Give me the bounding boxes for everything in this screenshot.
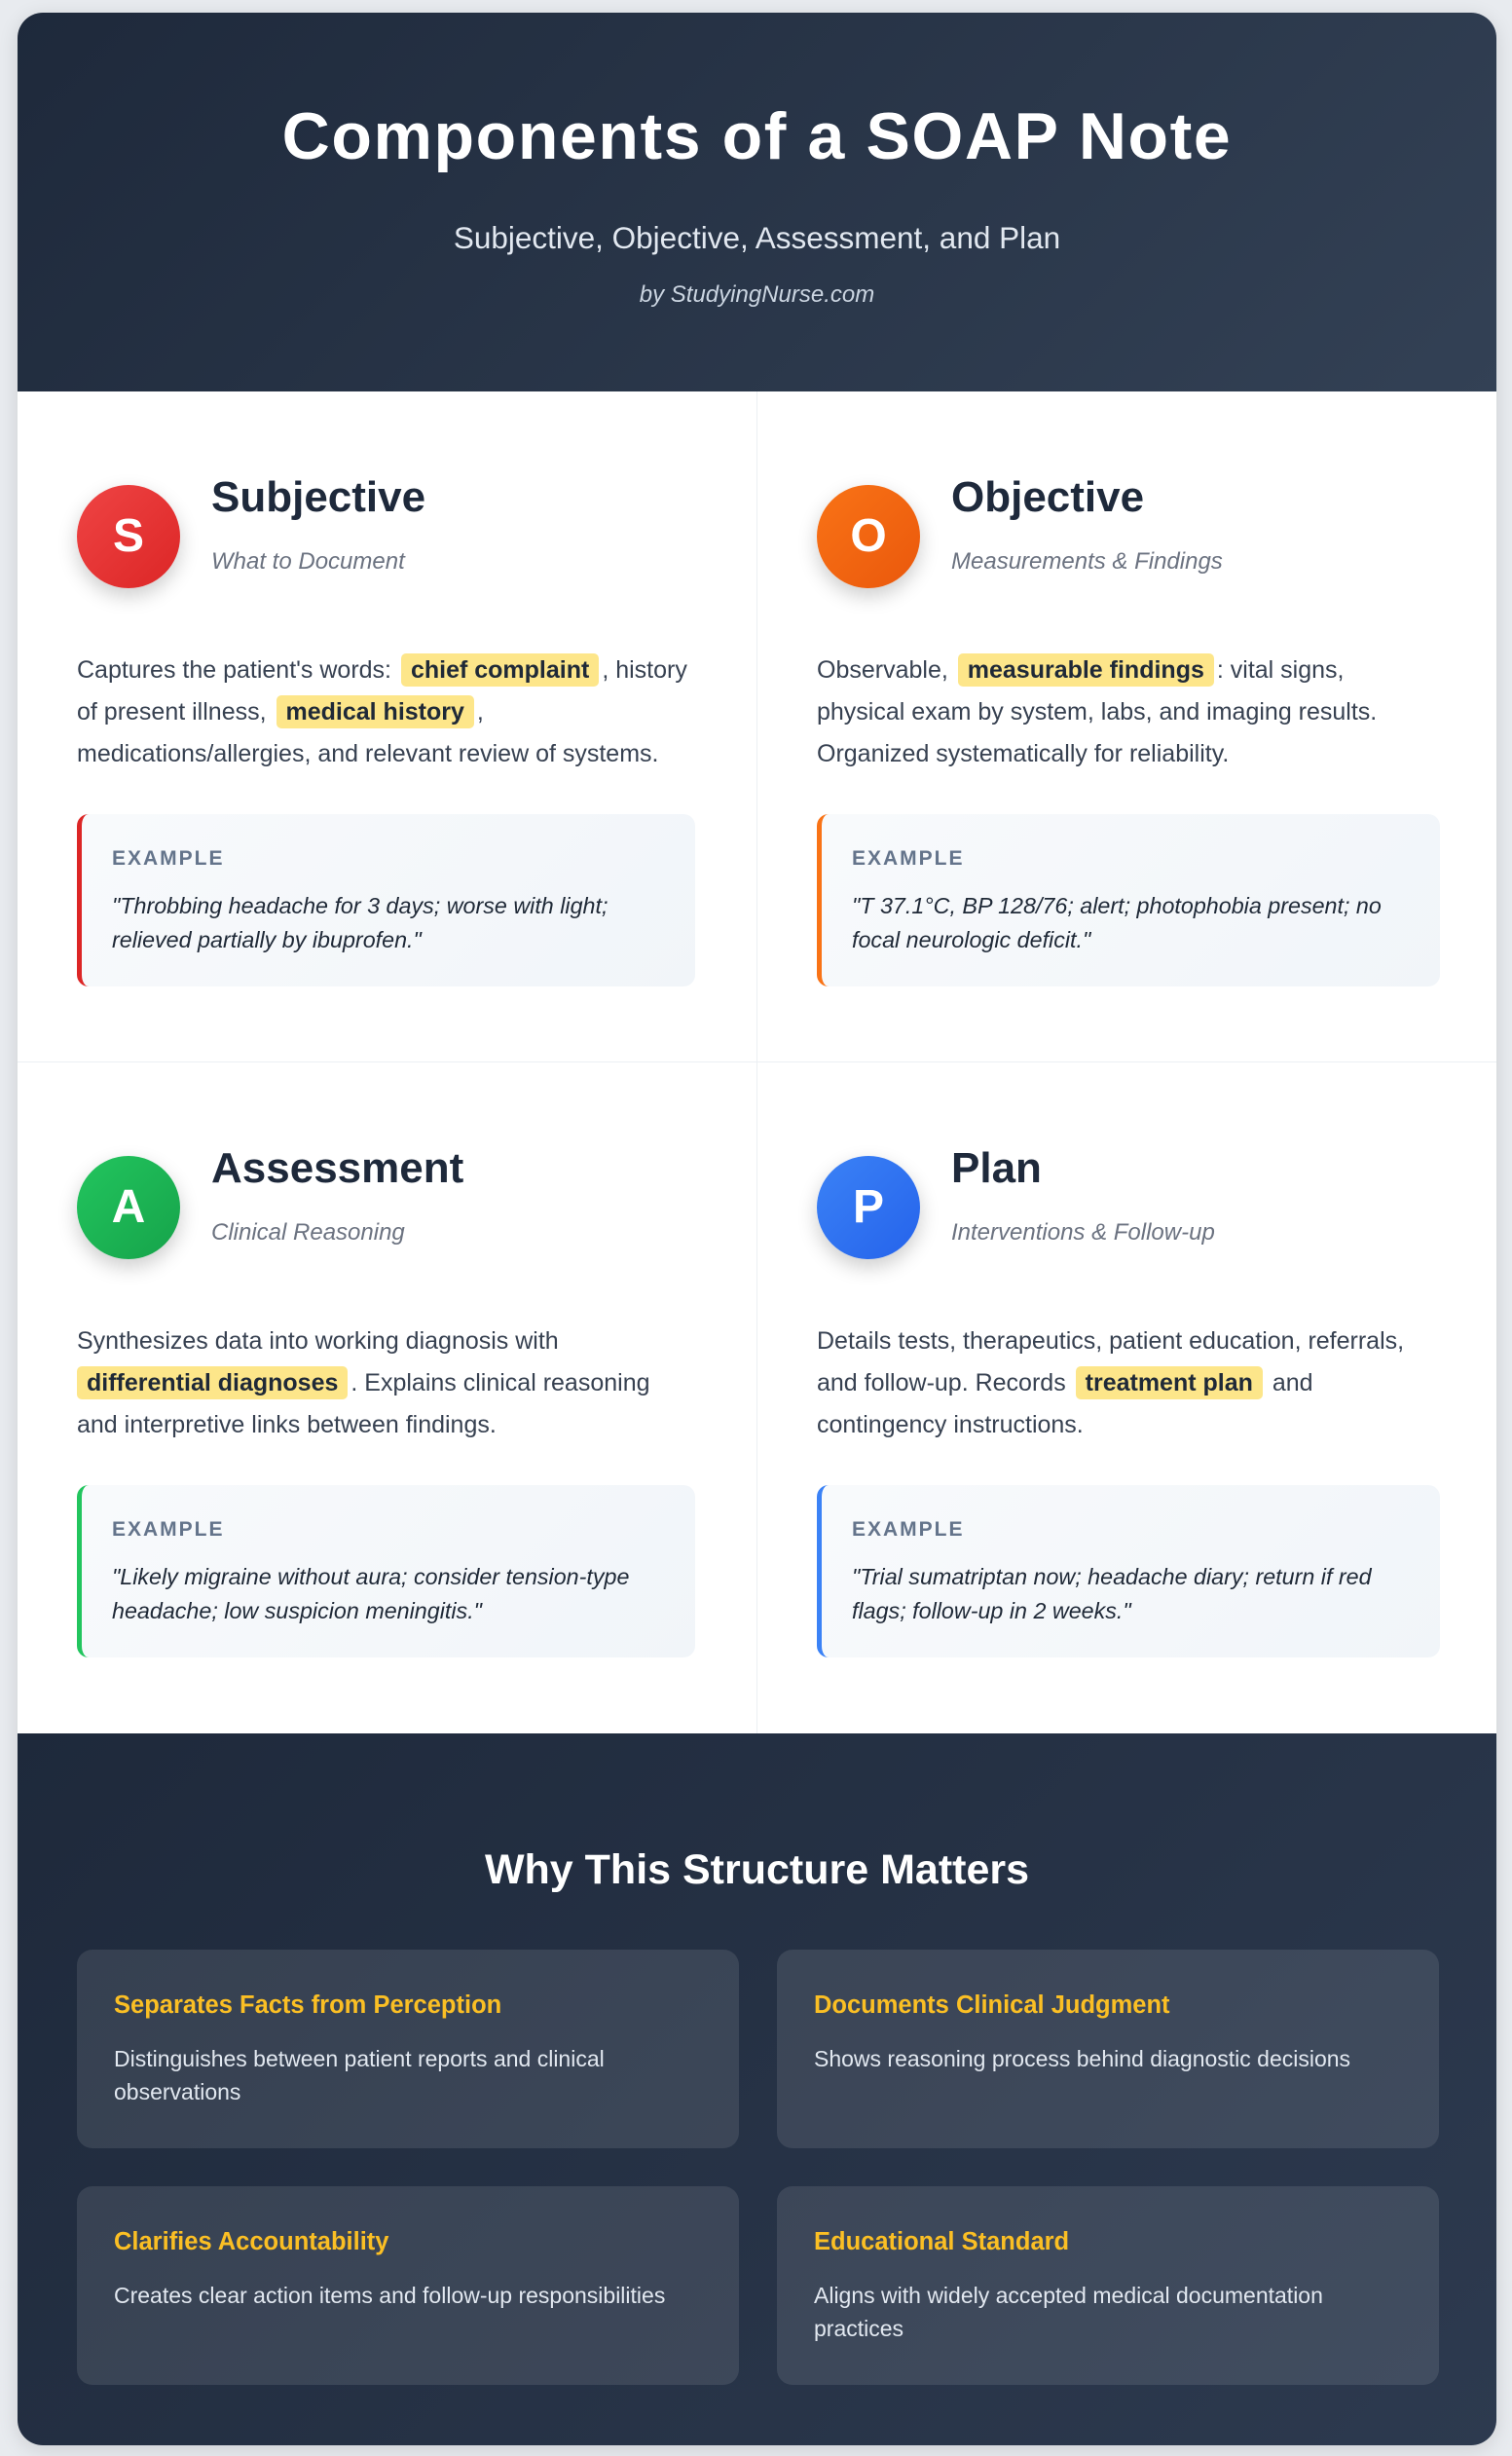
card: separates facts: Distinguishes between patient reports and clinical observations [114,2046,605,2104]
icon: A: A [112,1181,145,1233]
byline: by StudyingNurse.com [640,281,874,308]
example box: "Throbbing headache for 3 days; worse with light; relieved partially by ibuprofen." [112,893,608,952]
heading: Objective [951,473,1144,521]
card: educational standard [777,2186,1439,2385]
card: clinical judgment: Shows reasoning process behind diagnostic decisions [814,2046,1350,2071]
example box [817,1485,1440,1657]
heading: Subjective [211,473,425,521]
example box: EXAMPLE [112,1518,225,1541]
example box: "Trial sumatriptan now; headache diary; return if red flags; follow-up in 2 weeks." [852,1564,1372,1623]
card: accountability: Clarifies Accountability [114,2228,388,2255]
description: Captures the patient's words: chief complaint , history of present illness, medical history , medications/allergies, and relevant review of systems. [77,656,687,767]
icon: S [77,485,180,588]
example box: EXAMPLE [852,847,965,870]
panel: plan [808,1144,1440,1657]
example box: EXAMPLE [852,1518,965,1541]
panel: assessment [68,1144,695,1657]
subheading: Clinical Reasoning [211,1219,405,1246]
subheading: What to Document [211,548,405,575]
icon: S: S [113,510,144,562]
card: separates facts: Separates Facts from Perception [114,1991,501,2019]
card: educational standard: Aligns with widely accepted medical documentation practices [814,2283,1323,2341]
panel: objective [808,473,1440,986]
panel: why this structure matters [18,1733,1496,2445]
description: Synthesizes data into working diagnosis with differential diagnoses . Explains clinical reasoning and interpretive links between findings. [77,1327,650,1438]
description: Observable, measurable findings : vital signs, physical exam by system, labs, and imaging results. Organized systematically for reliability. [817,656,1377,767]
example box [77,814,695,986]
card: educational standard: Educational Standard [814,2228,1069,2255]
card: clinical judgment: Documents Clinical Judgment [814,1991,1170,2019]
panel: subjective [68,473,695,986]
example box: "T 37.1°C, BP 128/76; alert; photophobia present; no focal neurologic deficit." [852,893,1382,952]
subheading: Interventions & Follow-up [951,1219,1215,1246]
icon: O: O [850,510,887,562]
example box [817,814,1440,986]
description: Details tests, therapeutics, patient education, referrals, and follow-up. Records treatment plan and contingency instructions. [817,1327,1404,1438]
icon: P [817,1156,920,1259]
card: accountability: Creates clear action items and follow-up responsibilities [114,2283,665,2308]
icon: O [817,485,920,588]
title: Components of a SOAP Note [282,99,1232,173]
subtitle: Subjective, Objective, Assessment, and Plan [454,220,1060,255]
card: accountability [77,2186,739,2385]
header [18,13,1496,391]
icon: A [77,1156,180,1259]
example box [77,1485,695,1657]
example box: EXAMPLE [112,847,225,870]
example box: "Likely migraine without aura; consider tension-type headache; low suspicion meningitis." [112,1564,629,1623]
subheading: Measurements & Findings [951,548,1223,575]
heading: Plan [951,1144,1042,1192]
card: clinical judgment [777,1950,1439,2148]
card: separates facts [77,1950,739,2148]
icon: P: P [853,1181,884,1233]
section heading: Why This Structure Matters [485,1846,1029,1893]
heading: Assessment [211,1144,463,1192]
